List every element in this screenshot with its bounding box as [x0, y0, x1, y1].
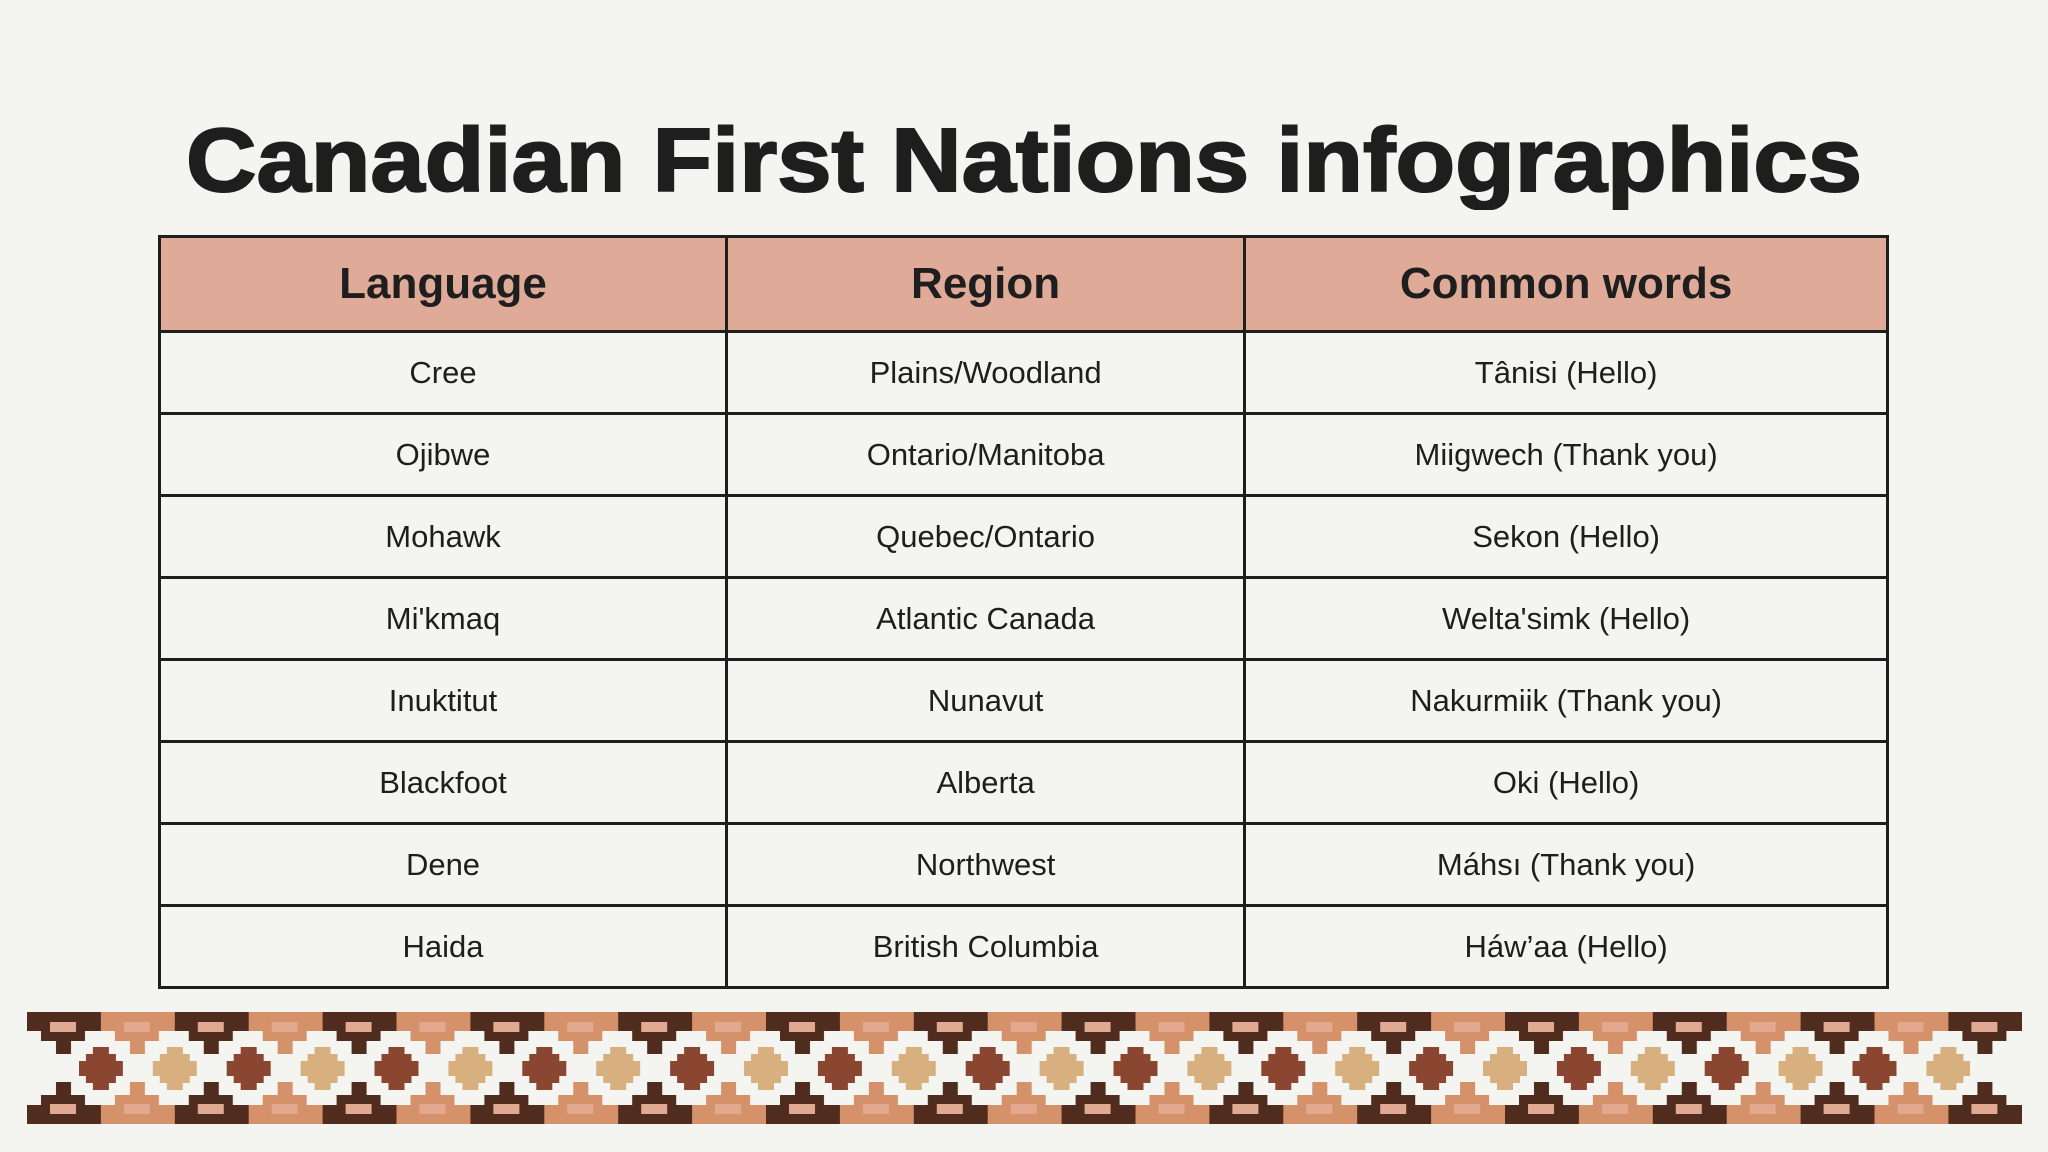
table: languages: Common words — [1400, 259, 1732, 308]
title: Canadian First Nations infographics — [186, 111, 1862, 210]
table: languages — [158, 235, 1889, 989]
table: languages: Háw’aa (Hello) — [1464, 928, 1668, 964]
table: languages: Northwest — [916, 846, 1055, 882]
table: languages: Plains/Woodland — [870, 354, 1102, 390]
table: languages: Sekon (Hello) — [1472, 518, 1660, 554]
table: languages: Oki (Hello) — [1493, 764, 1639, 800]
table: languages: Máhsı (Thank you) — [1437, 846, 1695, 882]
table: languages: Ojibwe — [396, 436, 490, 472]
table: languages: Dene — [406, 846, 480, 882]
table: languages: Mohawk — [385, 518, 501, 554]
table: languages: Language — [339, 259, 547, 308]
table: languages: Nunavut — [928, 682, 1043, 718]
table: languages: Haida — [402, 928, 484, 964]
table: languages: British Columbia — [873, 928, 1098, 964]
table: languages: Region — [911, 259, 1060, 308]
table: languages: Nakurmiik (Thank you) — [1410, 682, 1722, 718]
table: languages: Ontario/Manitoba — [867, 436, 1105, 472]
table: languages: Tânisi (Hello) — [1475, 354, 1657, 390]
table: languages: Miigwech (Thank you) — [1414, 436, 1718, 472]
table: languages: Atlantic Canada — [876, 600, 1095, 636]
table: languages: Mi'kmaq — [386, 600, 500, 636]
table: languages: Inuktitut — [389, 682, 497, 718]
decorative pattern band — [27, 1012, 2022, 1124]
table: languages: Alberta — [936, 764, 1035, 800]
table: languages: Cree — [409, 354, 477, 390]
table: languages: Welta'simk (Hello) — [1442, 600, 1690, 636]
table: languages: Blackfoot — [379, 764, 507, 800]
table: languages: Quebec/Ontario — [876, 518, 1095, 554]
